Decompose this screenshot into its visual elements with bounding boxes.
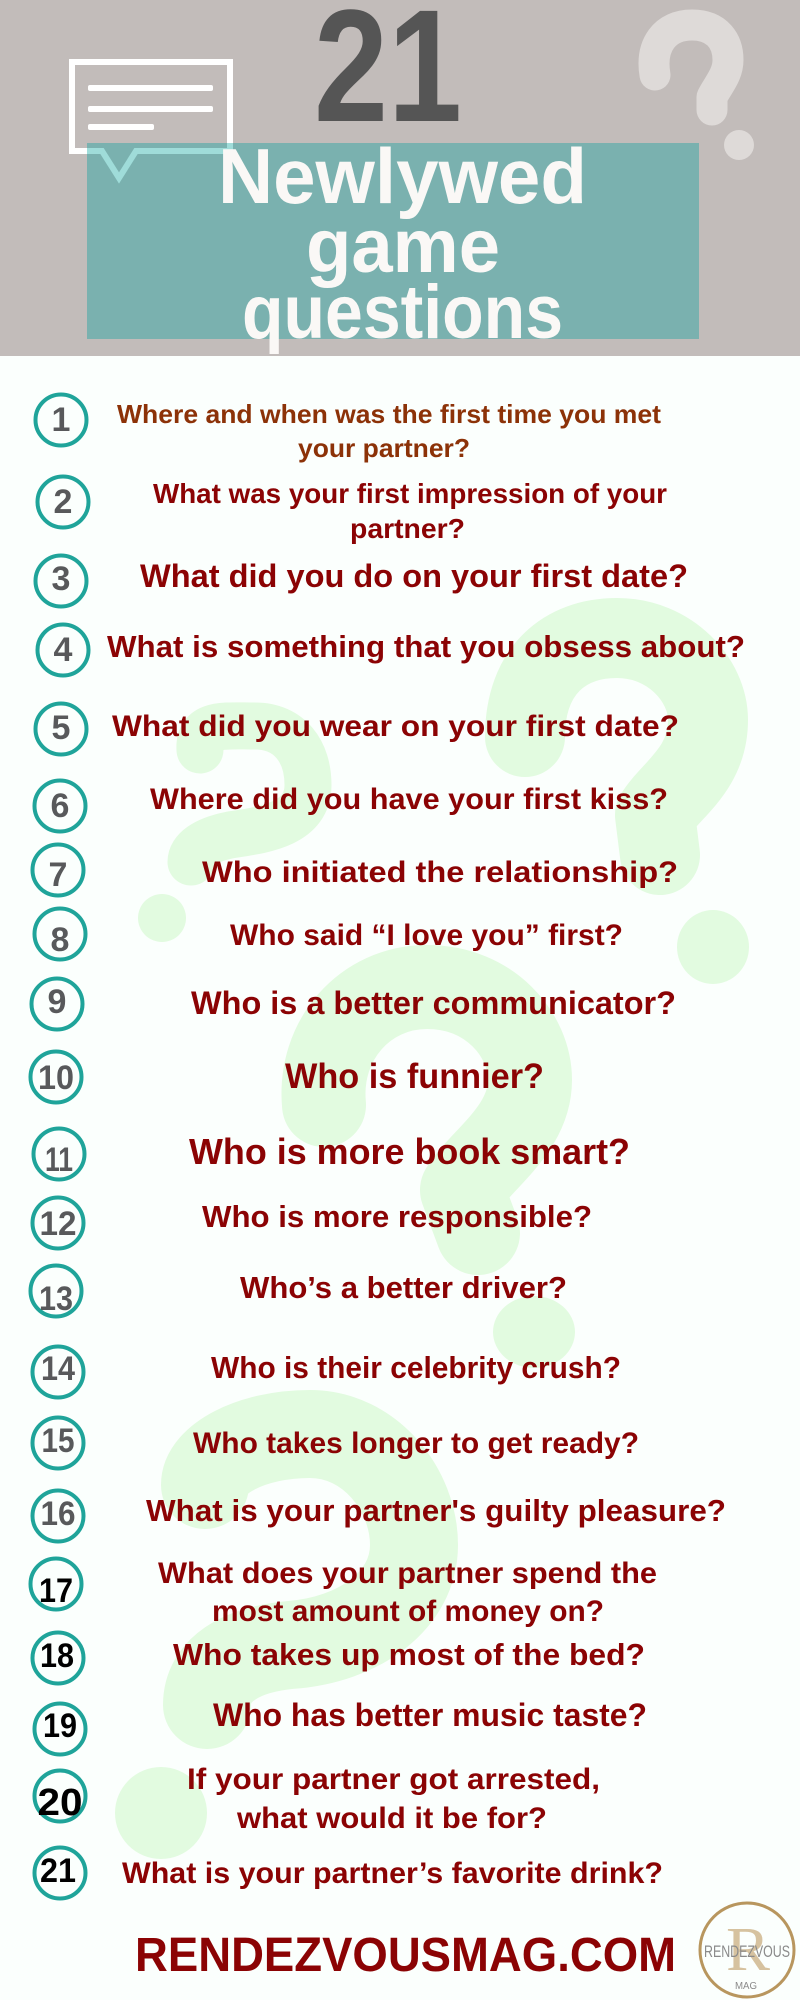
question 13: Who’s a better driver? bbox=[240, 1270, 567, 1305]
question 9: Who is a better communicator? bbox=[191, 985, 676, 1021]
question 19 bbox=[34, 1697, 647, 1754]
question 4: 4 bbox=[54, 631, 73, 669]
question 11 bbox=[34, 1128, 630, 1180]
question 17: most amount of money on? bbox=[212, 1595, 604, 1628]
question 3: 3 bbox=[52, 560, 70, 598]
question 17: 17 bbox=[39, 1572, 73, 1610]
title text: game bbox=[306, 204, 500, 289]
logo: R bbox=[726, 1916, 771, 1984]
question 11: 11 bbox=[45, 1141, 73, 1179]
question 5 bbox=[36, 704, 679, 754]
question 14: 14 bbox=[41, 1350, 75, 1388]
title text: Newlywed bbox=[218, 132, 587, 220]
question 6 bbox=[34, 780, 668, 832]
question 14: Who is their celebrity crush? bbox=[211, 1350, 621, 1385]
question 18 bbox=[32, 1632, 645, 1684]
question 3: What did you do on your first date? bbox=[140, 558, 688, 594]
question 8 bbox=[34, 908, 623, 960]
question 16: 16 bbox=[40, 1495, 76, 1533]
teal title box bbox=[87, 143, 699, 339]
logo bbox=[700, 1903, 794, 1997]
question 19: Who has better music taste? bbox=[213, 1697, 647, 1733]
question 18: 18 bbox=[40, 1637, 74, 1675]
question 12 bbox=[32, 1198, 592, 1248]
question 13: 13 bbox=[39, 1280, 73, 1318]
question 2: What was your first impression of your bbox=[153, 478, 667, 509]
question 6: 6 bbox=[51, 787, 69, 825]
question 16 bbox=[32, 1490, 726, 1542]
question 4 bbox=[38, 624, 745, 676]
title text bbox=[218, 132, 587, 355]
question 1: Where and when was the first time you met bbox=[117, 399, 661, 429]
website footer: RENDEZVOUSMAG.COM bbox=[135, 1929, 676, 1982]
bubble overlap on teal box bbox=[87, 143, 233, 184]
question 2: 2 bbox=[54, 483, 72, 521]
question 8: Who said “I love you” first? bbox=[230, 919, 623, 952]
question 1: your partner? bbox=[298, 433, 470, 463]
question 13 bbox=[30, 1266, 567, 1318]
question 19: 19 bbox=[43, 1707, 77, 1745]
question 21: 21 bbox=[40, 1852, 76, 1890]
question 14 bbox=[32, 1346, 621, 1398]
question 2 bbox=[38, 476, 667, 544]
question 7 bbox=[32, 844, 678, 896]
question 20 bbox=[34, 1763, 600, 1835]
title text: questions bbox=[242, 270, 563, 355]
question 17 bbox=[30, 1557, 657, 1628]
question 3 bbox=[36, 556, 688, 606]
question 9: 9 bbox=[48, 983, 66, 1021]
icon: question mark header bbox=[654, 25, 754, 160]
question 15 bbox=[32, 1418, 639, 1468]
icon: speech bubble bbox=[72, 62, 230, 178]
question 17: What does your partner spend the bbox=[158, 1557, 657, 1590]
icon: question mark centre bbox=[323, 987, 575, 1368]
question 10: Who is funnier? bbox=[285, 1057, 544, 1096]
icon: question mark left bbox=[138, 726, 308, 942]
question 12: 12 bbox=[40, 1205, 76, 1243]
question 10 bbox=[30, 1052, 544, 1102]
question 2: partner? bbox=[350, 513, 465, 544]
question 7: Who initiated the relationship? bbox=[202, 856, 678, 889]
background question marks bbox=[115, 638, 749, 1859]
question 20: 20 bbox=[38, 1782, 82, 1824]
question 15: 15 bbox=[42, 1422, 74, 1460]
logo: MAG bbox=[735, 1981, 757, 1992]
question 12: Who is more responsible? bbox=[202, 1199, 592, 1234]
question 1 bbox=[36, 394, 661, 463]
question 11: Who is more book smart? bbox=[189, 1131, 630, 1172]
icon: question mark bottom bbox=[115, 1434, 414, 1859]
question 18: Who takes up most of the bed? bbox=[173, 1637, 645, 1672]
question 5: 5 bbox=[52, 709, 70, 747]
header panel bbox=[0, 0, 800, 356]
question 15: Who takes longer to get ready? bbox=[193, 1427, 639, 1460]
question 20: If your partner got arrested, bbox=[187, 1763, 600, 1796]
icon: question mark top right bbox=[525, 638, 749, 984]
question 6: Where did you have your first kiss? bbox=[150, 783, 668, 816]
question 1: 1 bbox=[52, 401, 70, 439]
question 8: 8 bbox=[51, 921, 69, 959]
question 21: What is your partner’s favorite drink? bbox=[122, 1857, 663, 1890]
question 9 bbox=[32, 978, 676, 1030]
question 5: What did you wear on your first date? bbox=[112, 710, 679, 743]
question 4: What is something that you obsess about? bbox=[107, 629, 745, 664]
question 20: what would it be for? bbox=[236, 1802, 547, 1835]
question 21 bbox=[34, 1848, 663, 1898]
question 16: What is your partner's guilty pleasure? bbox=[146, 1493, 726, 1528]
question 10: 10 bbox=[38, 1059, 74, 1097]
question 7: 7 bbox=[49, 856, 67, 894]
